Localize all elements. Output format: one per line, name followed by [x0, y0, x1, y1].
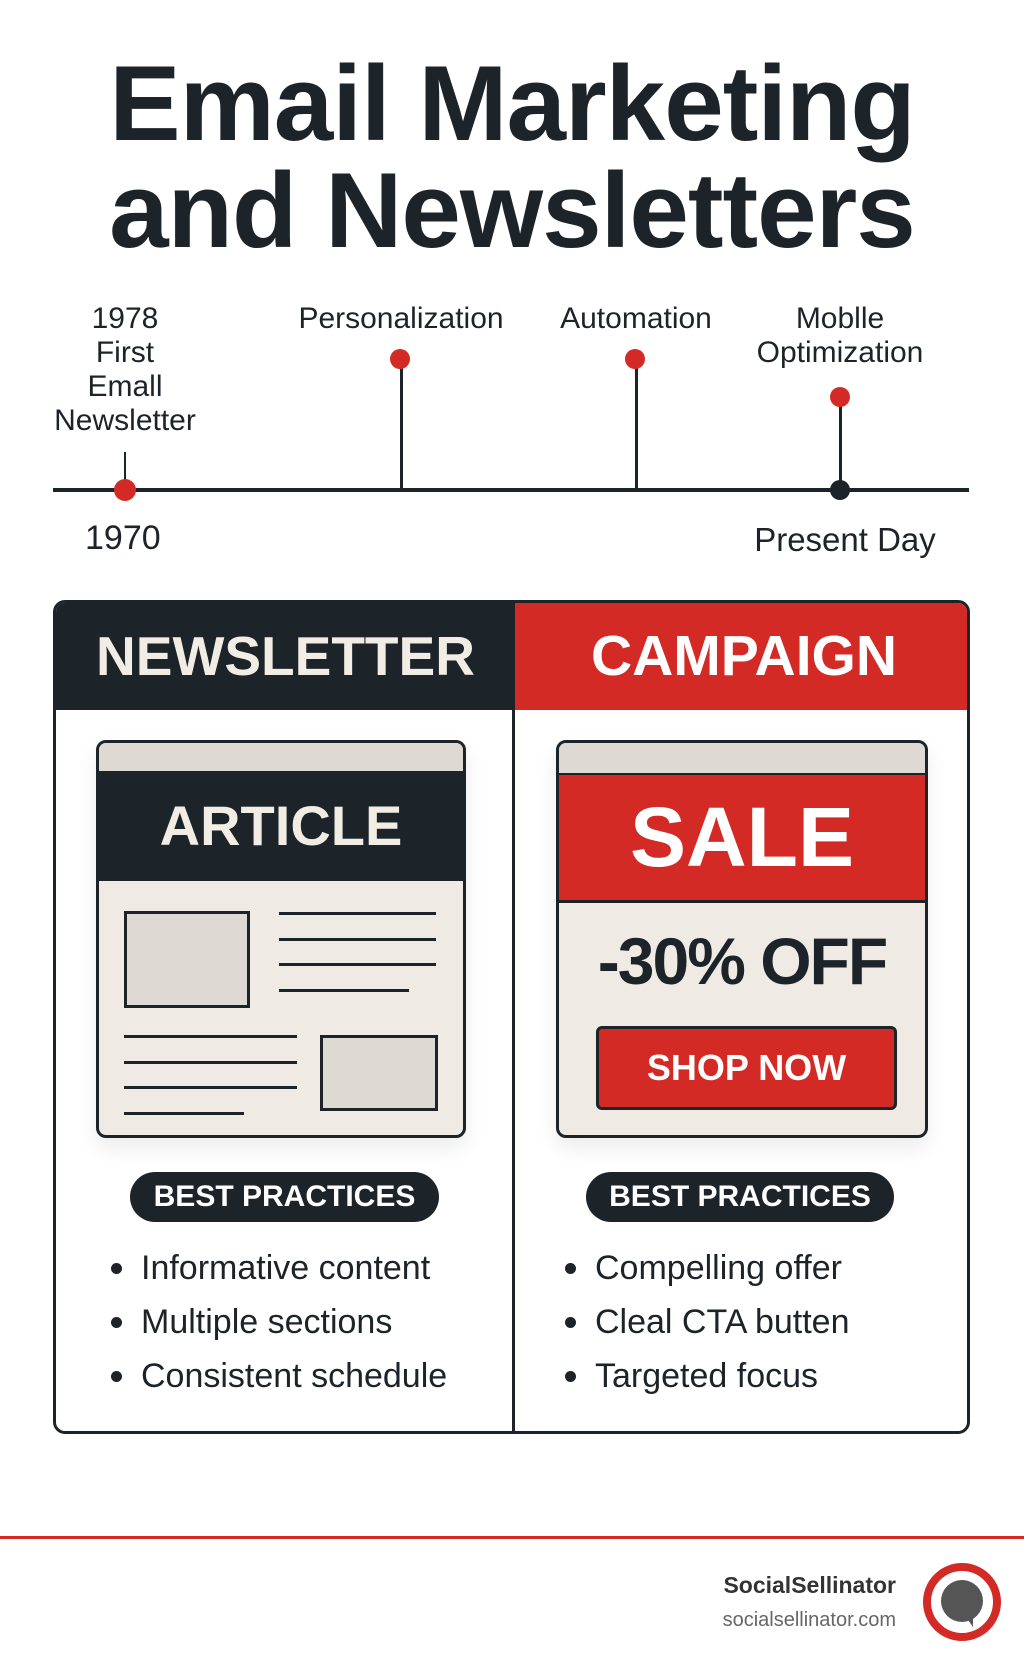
- timeline axis: [53, 488, 969, 492]
- footer rule: [0, 1536, 1024, 1539]
- milestone: mobile: Optimization: [757, 336, 923, 369]
- list: newsletter practices: Consistent schedule: [141, 1357, 447, 1395]
- milestone: 1978: [54, 302, 196, 437]
- milestone: automation: Automation: [560, 302, 712, 335]
- milestone: personalization: Personalization: [298, 302, 504, 335]
- brand url: socialsellinator.com: [723, 1609, 896, 1631]
- shop now button: SHOP NOW: [647, 1047, 846, 1088]
- pill: best practices campaign: BEST PRACTICES: [609, 1180, 871, 1213]
- list: campaign practices: [565, 1249, 850, 1395]
- milestone: mobile: [757, 302, 923, 369]
- article banner: ARTICLE: [160, 794, 402, 857]
- brand name: SocialSellinator: [723, 1572, 896, 1598]
- list: campaign practices: Targeted focus: [595, 1357, 818, 1395]
- layout icons: [124, 911, 250, 1008]
- label present day: Present Day: [754, 521, 936, 558]
- milestone: 1978: First: [96, 336, 154, 369]
- list: newsletter practices: [111, 1249, 447, 1395]
- list: newsletter practices: Informative content: [141, 1249, 430, 1287]
- pill: best practices campaign: [586, 1172, 894, 1222]
- pill: best practices newsletter: BEST PRACTICES: [154, 1180, 415, 1213]
- label 1970: 1970: [85, 519, 161, 557]
- milestone: 1978: Emall: [87, 370, 162, 403]
- card: article: [96, 740, 466, 1138]
- title: and Newsletters: [109, 150, 915, 270]
- milestone: mobile: Moblle: [796, 302, 884, 335]
- sale banner: SALE: [630, 790, 854, 884]
- sale banner: [559, 773, 925, 903]
- logo: [923, 1563, 1001, 1641]
- discount text: -30% OFF: [598, 924, 886, 998]
- header: newsletter: [56, 603, 515, 710]
- title: [109, 43, 915, 270]
- milestone: 1978: Newsletter: [54, 404, 196, 437]
- card: sale: [556, 740, 928, 1138]
- timeline: [53, 302, 969, 558]
- article banner: [99, 771, 463, 881]
- title: Email Marketing: [109, 43, 915, 163]
- shop now button: [596, 1026, 897, 1110]
- list: campaign practices: Cleal CTA butten: [595, 1303, 850, 1341]
- pill: best practices newsletter: [130, 1172, 439, 1222]
- panel: comparison: [53, 600, 970, 1434]
- list: newsletter practices: Multiple sections: [141, 1303, 392, 1341]
- milestone: 1978: 1978: [92, 302, 158, 335]
- list: campaign practices: Compelling offer: [595, 1249, 842, 1287]
- header: campaign: CAMPAIGN: [591, 624, 897, 688]
- header: newsletter: NEWSLETTER: [96, 625, 475, 687]
- header: campaign: [515, 603, 973, 710]
